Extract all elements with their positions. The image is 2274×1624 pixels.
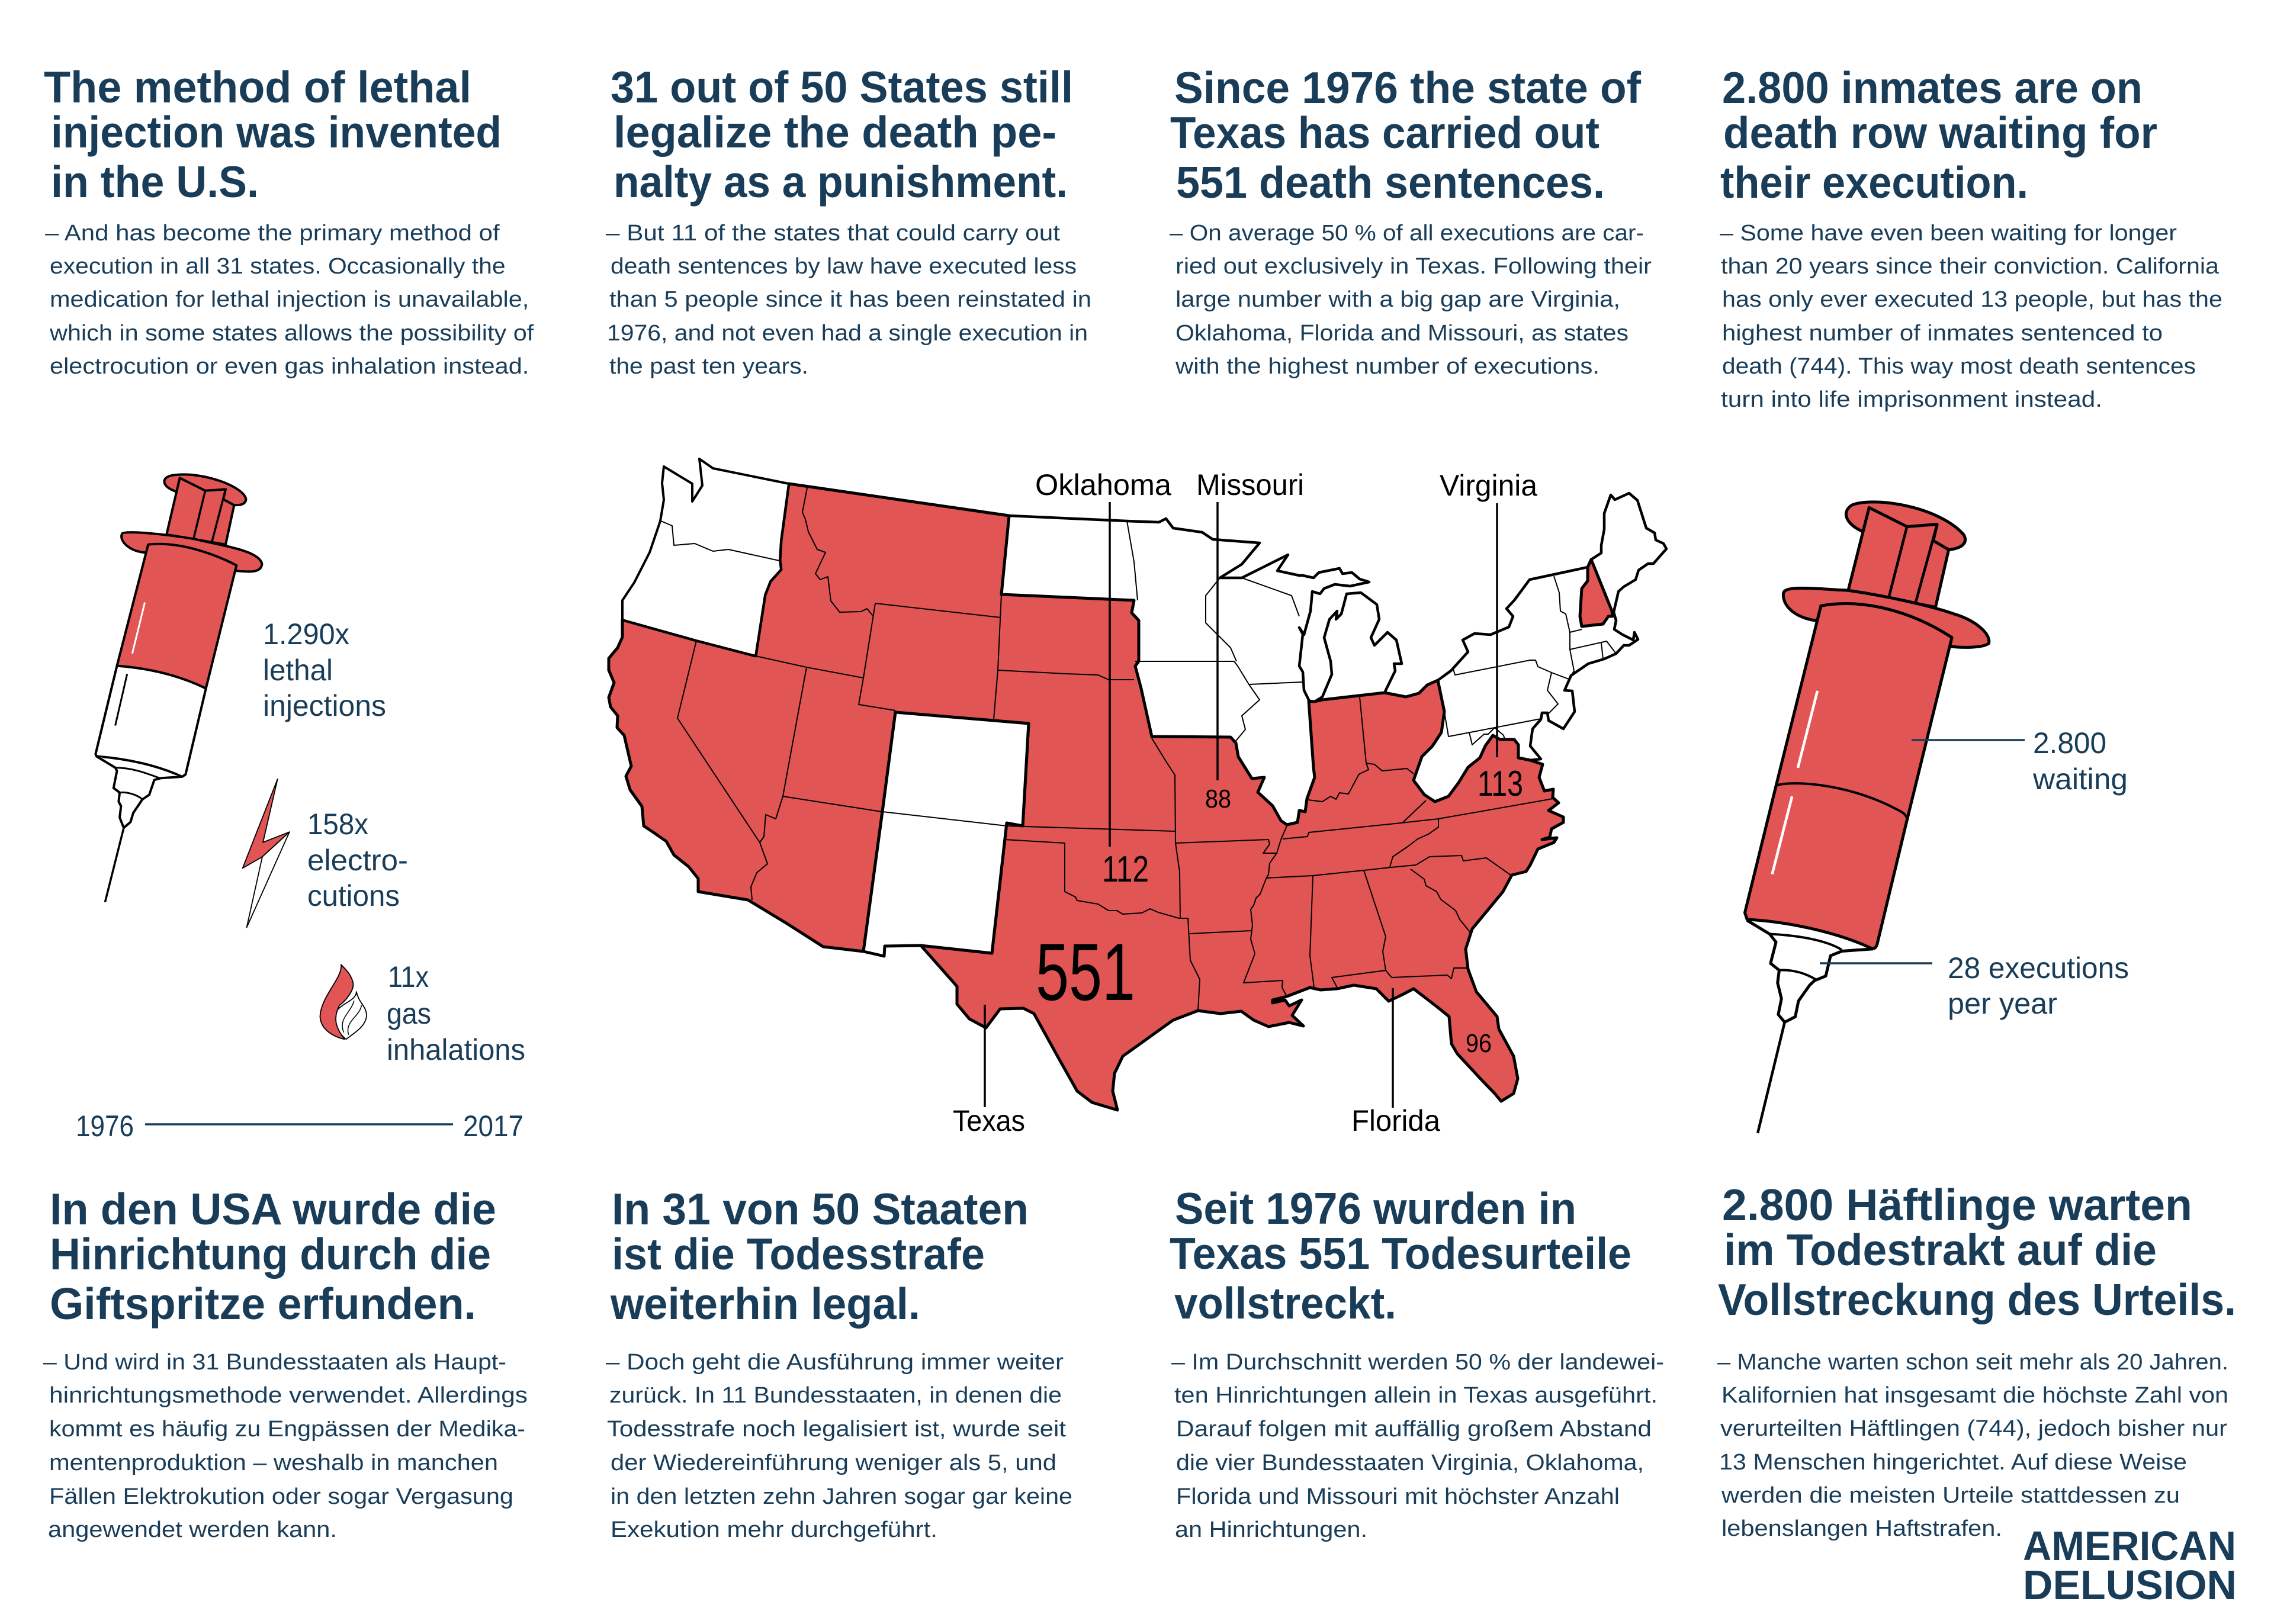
panel: english column 4 <box>1720 63 2222 412</box>
callout: 2800 waiting: waiting <box>2032 763 2128 796</box>
map labels: Florida <box>1351 1104 1440 1137</box>
text block: 31 of 50 states: – But 11 of the states that could carry out <box>606 221 1060 246</box>
heading: death row <box>1720 63 2157 207</box>
timeline 1976-2017: 1976 <box>76 1110 134 1143</box>
heading: lethal injection <box>44 62 502 207</box>
text block: Texas: Oklahoma, Florida and Missouri, as states <box>1175 321 1629 346</box>
text block: Giftspritze: angewendet werden kann. <box>48 1517 337 1542</box>
icon: lightning bolt <box>243 779 290 927</box>
map numbers: 112 <box>1102 849 1149 890</box>
legend: gas inhalations: 11x <box>388 960 429 993</box>
text block: Todestrakt: lebenslangen Haftstrafen. <box>1721 1516 2002 1541</box>
text block: 31 of 50 states: the past ten years. <box>609 354 808 379</box>
legend: lethal injections <box>263 618 386 722</box>
heading: 31 of 50 states: legalize the death pe- <box>614 107 1056 157</box>
map: Washington and Oregon <box>622 459 789 656</box>
map numbers <box>1036 764 1523 1058</box>
text block: Todestrakt <box>1717 1350 2228 1541</box>
map: Colorado and New Mexico <box>863 712 1029 956</box>
callout: 28 executions per year: 28 executions <box>1948 951 2129 985</box>
logo: American Delusion <box>2023 1523 2237 1608</box>
heading: Giftspritze: Hinrichtung durch die <box>50 1229 491 1279</box>
panel: english column 1 <box>44 62 534 379</box>
legend: lethal injections: injections <box>263 689 386 722</box>
text block: Texas: with the highest number of executions. <box>1175 354 1599 379</box>
map labels: Missouri <box>1196 468 1304 501</box>
map numbers: 113 <box>1478 764 1523 803</box>
map labels: Oklahoma <box>1035 468 1171 501</box>
text block: Todestrakt: werden die meisten Urteile stattdessen zu <box>1721 1483 2180 1508</box>
heading: 31 of 50 states <box>611 62 1073 207</box>
map labels: Virginia <box>1440 469 1537 502</box>
heading: Giftspritze: In den USA wurde die <box>50 1184 496 1234</box>
heading: Texas german: Seit 1976 wurden in <box>1175 1184 1576 1233</box>
text block: lethal injection: which in some states allows the possibility of <box>49 321 534 346</box>
timeline 1976-2017: 2017 <box>463 1110 523 1143</box>
text block: 31 of 50 states <box>606 221 1091 379</box>
text block: Giftspritze: Fällen Elektrokution oder sogar Vergasung <box>49 1484 513 1509</box>
text block: Texas german: Darauf folgen mit auffällig großem Abstand <box>1176 1417 1652 1442</box>
panel: english column 3 <box>1170 63 1652 379</box>
text block: death row: – Some have even been waiting for longer <box>1720 221 2177 246</box>
text block: Todesstrafe <box>606 1350 1072 1542</box>
text block: Texas german: die vier Bundesstaaten Virginia, Oklahoma, <box>1176 1451 1644 1475</box>
heading: death row: 2.800 inmates are on <box>1722 63 2143 112</box>
map: white state borders <box>661 521 1616 745</box>
legend: gas inhalations: inhalations <box>387 1033 525 1066</box>
heading: Todesstrafe: In 31 von 50 Staaten <box>612 1184 1029 1234</box>
text block: Todestrakt: verurteilten Häftlingen (744), jedoch bisher nur <box>1720 1416 2227 1441</box>
panel: english column 2 <box>606 62 1091 379</box>
text block: Giftspritze: hinrichtungsmethode verwendet. Allerdings <box>49 1383 528 1408</box>
text block: Todesstrafe: in den letzten zehn Jahren sogar gar keine <box>611 1484 1072 1509</box>
heading: Todestrakt <box>1718 1180 2236 1324</box>
map numbers: 88 <box>1205 784 1231 813</box>
panel: german column 3 <box>1170 1184 1664 1542</box>
heading: Giftspritze: Giftspritze erfunden. <box>50 1279 476 1329</box>
icon: left syringe <box>95 474 262 902</box>
text block: Todesstrafe: – Doch geht die Ausführung immer weiter <box>606 1350 1064 1375</box>
callout: 28 executions per year: per year <box>1948 987 2057 1020</box>
text block: Giftspritze: kommt es häufig zu Engpässen der Medika- <box>49 1417 525 1442</box>
text block: 31 of 50 states: than 5 people since it has been reinstated in <box>609 287 1091 312</box>
text block: Todestrakt: 13 Menschen hingerichtet. Auf diese Weise <box>1719 1450 2187 1475</box>
icon: gas flame <box>320 964 367 1039</box>
text block: Todesstrafe: Exekution mehr durchgeführt. <box>611 1517 937 1542</box>
map: red state borders <box>677 488 1553 1011</box>
legend: electrocutions: electro- <box>307 844 408 877</box>
icon: right syringe <box>1745 502 1989 1133</box>
legend: gas inhalations: gas <box>387 997 431 1030</box>
text block: Texas: – On average 50 % of all executions are car- <box>1170 221 1644 246</box>
logo: American Delusion: AMERICAN <box>2023 1523 2236 1569</box>
text block: Todestrakt: Kalifornien hat insgesamt die höchste Zahl von <box>1721 1383 2228 1408</box>
map numbers: 96 <box>1466 1029 1492 1058</box>
heading: Texas german: Texas 551 Todesurteile <box>1170 1229 1631 1278</box>
text block: death row: turn into life imprisonment instead. <box>1721 387 2102 412</box>
map: red death-penalty states <box>609 484 1563 1110</box>
text block: Giftspritze: – Und wird in 31 Bundesstaaten als Haupt- <box>43 1350 506 1375</box>
text block: lethal injection: execution in all 31 states. Occasionally the <box>50 254 506 279</box>
text block: Texas: large number with a big gap are Virginia, <box>1175 287 1620 312</box>
heading: Todestrakt: 2.800 Häftlinge warten <box>1722 1180 2192 1230</box>
logo: American Delusion: DELUSION <box>2023 1562 2237 1608</box>
text block: Todesstrafe: Todesstrafe noch legalisiert ist, wurde seit <box>607 1417 1066 1442</box>
map: United States executions <box>609 459 1666 1137</box>
text block: death row: highest number of inmates sentenced to <box>1722 321 2163 346</box>
map labels: Texas <box>953 1104 1025 1137</box>
legend: gas inhalations <box>387 960 525 1066</box>
text block: Texas german: – Im Durchschnitt werden 50 % der landewei- <box>1171 1350 1664 1375</box>
callout: 28 executions per year <box>1820 951 2129 1020</box>
heading: lethal injection: injection was invented <box>51 107 502 157</box>
heading: 31 of 50 states: nalty as a punishment. <box>614 157 1068 207</box>
heading: lethal injection: The method of lethal <box>44 62 471 112</box>
text block: Texas german <box>1171 1350 1664 1542</box>
panel: german column 4 <box>1717 1180 2236 1541</box>
heading: Todesstrafe: weiterhin legal. <box>610 1279 920 1329</box>
legend: electrocutions <box>307 808 408 912</box>
legend: lethal injections: 1.290x <box>263 618 349 651</box>
heading: Texas: Since 1976 the state of <box>1174 63 1642 112</box>
text block: Todestrakt: – Manche warten schon seit mehr als 20 Jahren. <box>1717 1350 2228 1375</box>
heading: lethal injection: in the U.S. <box>51 157 259 207</box>
text block: lethal injection: – And has become the primary method of <box>45 221 500 246</box>
panel: german column 1 <box>43 1184 528 1542</box>
heading: Todestrakt: Vollstreckung des Urteils. <box>1718 1275 2236 1324</box>
callout: 2800 waiting <box>1912 726 2128 796</box>
text block: Texas <box>1170 221 1652 379</box>
heading: 31 of 50 states: 31 out of 50 States still <box>611 62 1073 112</box>
map numbers: 551 <box>1036 927 1135 1018</box>
text block: Texas german: ten Hinrichtungen allein in Texas ausgeführt. <box>1174 1383 1658 1408</box>
map: New Hampshire <box>1580 559 1613 626</box>
heading: Texas german: vollstreckt. <box>1174 1278 1396 1328</box>
text block: Giftspritze <box>43 1350 528 1542</box>
text block: death row: has only ever executed 13 people, but has the <box>1722 287 2222 312</box>
heading: Texas: 551 death sentences. <box>1176 157 1605 207</box>
legend: lethal injections: lethal <box>263 654 333 687</box>
text block: Todesstrafe: der Wiedereinführung weniger als 5, und <box>611 1451 1056 1475</box>
leader lines <box>985 502 1497 1108</box>
map labels <box>953 468 1537 1137</box>
text block: death row: than 20 years since their conviction. California <box>1721 254 2220 279</box>
legend: electrocutions: 158x <box>307 808 368 841</box>
heading: Todesstrafe <box>610 1184 1029 1329</box>
text block: Texas german: Florida und Missouri mit höchster Anzahl <box>1176 1484 1620 1509</box>
text block: Texas: ried out exclusively in Texas. Following their <box>1175 254 1652 279</box>
text block: 31 of 50 states: 1976, and not even had a single execution in <box>607 321 1088 346</box>
text block: lethal injection <box>45 221 534 379</box>
heading: Texas: Texas has carried out <box>1170 108 1599 157</box>
text block: lethal injection: medication for lethal injection is unavailable, <box>50 287 529 312</box>
timeline 1976-2017 <box>76 1110 523 1143</box>
text block: death row <box>1720 221 2222 412</box>
text block: death row: death (744). This way most death sentences <box>1722 354 2196 379</box>
heading: Texas german <box>1170 1184 1631 1328</box>
callout: 2800 waiting: 2.800 <box>2033 726 2106 760</box>
heading: Texas <box>1170 63 1642 207</box>
heading: death row: death row waiting for <box>1723 108 2157 157</box>
heading: Todestrakt: im Todestrakt auf die <box>1724 1225 2157 1275</box>
text block: Texas german: an Hinrichtungen. <box>1175 1517 1367 1542</box>
text block: Todesstrafe: zurück. In 11 Bundesstaaten, in denen die <box>609 1383 1062 1408</box>
heading: Giftspritze <box>50 1184 496 1329</box>
text block: lethal injection: electrocution or even gas inhalation instead. <box>50 354 529 379</box>
panel: german column 2 <box>606 1184 1072 1542</box>
heading: Todesstrafe: ist die Todesstrafe <box>612 1229 985 1279</box>
text block: Giftspritze: mentenproduktion – weshalb in manchen <box>49 1451 498 1475</box>
legend: electrocutions: cutions <box>307 879 400 912</box>
heading: death row: their execution. <box>1720 157 2028 207</box>
text block: 31 of 50 states: death sentences by law have executed less <box>611 254 1077 279</box>
map: outlines of other white states <box>1009 493 1666 760</box>
